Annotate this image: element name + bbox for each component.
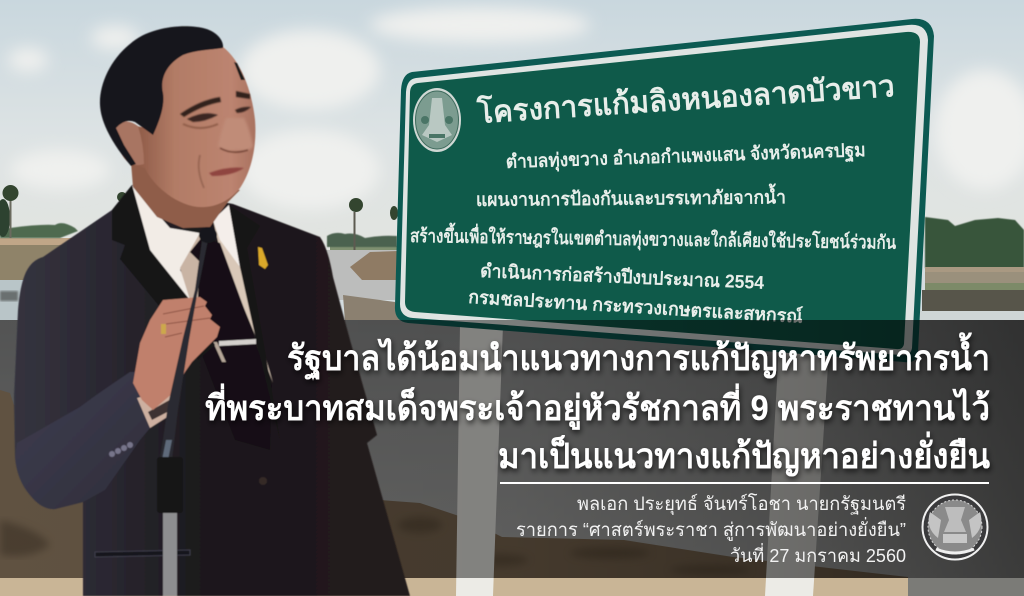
jacket pocket <box>95 550 190 557</box>
sign posts <box>456 325 829 596</box>
eyes, brows, nose and mouth <box>180 91 253 188</box>
microphone with stand <box>157 227 217 596</box>
speaker attribution <box>516 493 906 566</box>
figure: Prime Minister at microphone <box>14 26 410 596</box>
icon: palm trees <box>2 185 398 250</box>
forearm sleeve <box>15 372 150 509</box>
sign text lines: ตำบลทุ่งขวาง อำเภอกำแพงแสน จังหวัดนครปฐม <box>505 139 866 174</box>
hand <box>133 297 220 410</box>
speaker attribution: วันที่ 27 มกราคม 2560 <box>730 543 906 566</box>
ear <box>115 121 144 165</box>
sleeve buttons <box>109 442 133 457</box>
jacket <box>14 185 410 596</box>
sign text lines: ดำเนินการก่อสร้างปีงบประมาณ 2554 <box>480 260 765 293</box>
dark overlay band <box>0 320 1024 596</box>
neck <box>130 150 240 228</box>
hair <box>100 26 223 166</box>
panel: green project sign <box>395 19 934 362</box>
lapels <box>112 185 280 440</box>
background: ground and water behind the dark band <box>0 320 1024 596</box>
main headline <box>205 332 990 477</box>
speaker attribution: รายการ “ศาสตร์พระราชา สู่การพัฒนาอย่างยั่งยืน” <box>516 517 906 541</box>
main headline: ที่พระบาทสมเด็จพระเจ้าอยู่หัวรัชกาลที่ 9 พระราชทานไว้ <box>205 383 990 430</box>
sign text lines: สร้างขึ้นเพื่อให้ราษฎรในเขตตำบลทุ่งขวางและใกล้เคียงใช้ประโยชน์ร่วมกัน <box>410 222 897 255</box>
tie clip <box>219 339 256 346</box>
sign text lines <box>410 139 897 327</box>
shirt cuff and watch <box>137 388 175 428</box>
ring <box>161 324 166 334</box>
icon: government emblem <box>922 494 988 560</box>
jacket button <box>259 477 267 485</box>
sign text lines: แผนงานการป้องกันและบรรเทาภัยจากน้ำ <box>476 183 786 210</box>
background: sky with clouds <box>0 0 1024 250</box>
face <box>132 47 255 207</box>
icon: sign emblem <box>413 88 461 152</box>
shirt <box>132 185 273 383</box>
necktie <box>190 237 272 450</box>
distant trees on right bank <box>925 217 1024 268</box>
speaker attribution: พลเอก ประยุทธ์ จันทร์โอชา นายกรัฐมนตรี <box>577 493 906 516</box>
main headline: มาเป็นแนวทางแก้ปัญหาอย่างยั่งยืน <box>498 431 990 477</box>
icon: yellow lapel pin <box>258 247 268 269</box>
sign text lines: กรมชลประทาน กระทรวงเกษตรและสหกรณ์ <box>468 286 803 327</box>
background: distant landscape with palms, water and banks <box>0 185 1024 322</box>
sign title: โครงการแก้มลิงหนองลาดบัวขาว <box>475 67 896 130</box>
